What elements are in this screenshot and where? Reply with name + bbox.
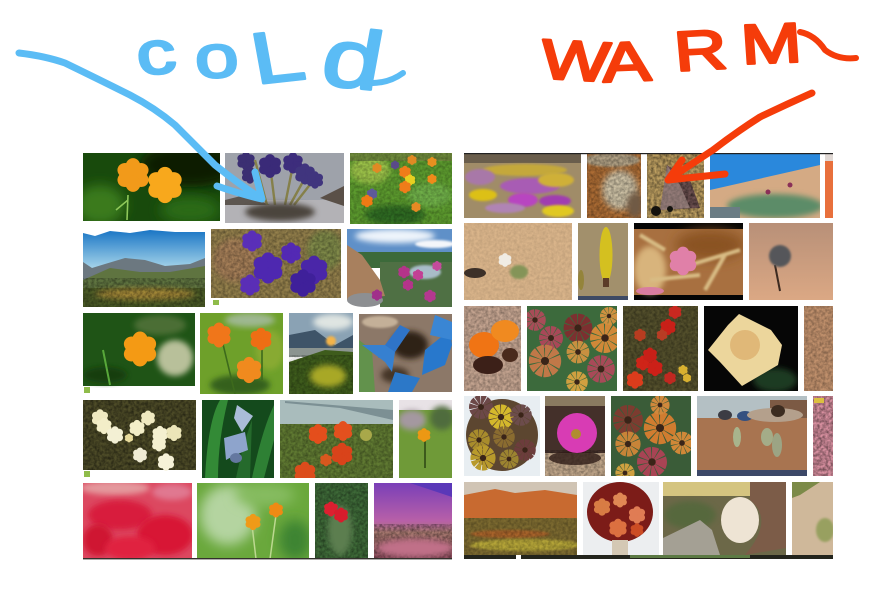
arrow: red pointing to warm flowers [668, 93, 812, 180]
photo: yellow flower spike in sand [578, 223, 628, 300]
photo: cropped orange edge [825, 154, 833, 218]
photo: blue sky mountain valley [83, 230, 205, 307]
heading: cold (handwritten blue) [132, 11, 403, 108]
photo: sand dune with blue sky and plants [710, 154, 820, 218]
photo: white bloom in sand desert [464, 223, 572, 300]
photo: alpine meadow with orange flowers [350, 153, 452, 224]
photo: two orange globeflowers [83, 153, 220, 221]
heading: WARM (handwritten red): WARM [538, 11, 804, 94]
photo: single globeflower in grass [399, 400, 452, 478]
photo: floral pattern edge [813, 396, 833, 476]
photo: camels and plants in desert [697, 396, 807, 476]
photo: purple pasqueflowers on snow [225, 153, 344, 223]
photo: sunset over mountain meadow [289, 313, 353, 394]
arrow: blue pointing to cold flowers [19, 53, 262, 199]
heading: cold (handwritten blue): L [244, 14, 310, 99]
heading: cold (handwritten blue): c [132, 18, 180, 88]
photo: sand edge [804, 306, 833, 391]
photo: cracked path with moss [792, 482, 834, 555]
photo: white bouquet on driftwood [663, 482, 786, 555]
photo: white flowers on red sand [587, 154, 641, 218]
heading: cold (handwritten blue): o [193, 22, 241, 91]
photo: orange globeflowers on green [200, 313, 283, 394]
photo: orange poppies on pebbles [464, 306, 521, 391]
photo: lone dark shrub on pink dune [749, 223, 833, 300]
panel: cold flower photos [75, 143, 455, 560]
photo: red lilies in grass [315, 483, 368, 558]
photo: zinnias [527, 306, 617, 391]
photo: pink flower on bronze bokeh [634, 223, 743, 300]
photo: pink flowers by river and rock [347, 229, 452, 307]
photo: purple hillside meadow [374, 483, 452, 558]
photo: orange dunes and desert bloom [464, 482, 577, 555]
photo: magenta cactus flower [545, 396, 605, 476]
photo: spotted flower spike [647, 154, 704, 218]
photo: purple violets on dry ground [211, 229, 341, 305]
photo: globeflowers on pale green bokeh [197, 483, 309, 558]
photo: pale blue bells among leaves [202, 400, 274, 478]
photo: white mountain avens [83, 400, 196, 477]
photo: orange lilies in meadow [280, 400, 393, 478]
photo: desert bloom yellow and purple carpet [464, 154, 581, 218]
photo: cream rose on black [704, 306, 798, 391]
photo: blue squills [359, 314, 452, 392]
photo: sunflower bouquet [464, 396, 540, 476]
heading: cold (handwritten blue): d [315, 11, 390, 108]
panel: warm flower photos [464, 153, 834, 559]
photo: bronze zinnias [611, 396, 691, 476]
photo: red and yellow flowers [623, 306, 698, 391]
photo: red and peach bouquet [583, 482, 659, 555]
photo: orange flower on dark green [83, 313, 195, 393]
photo: red leaves [83, 483, 192, 558]
